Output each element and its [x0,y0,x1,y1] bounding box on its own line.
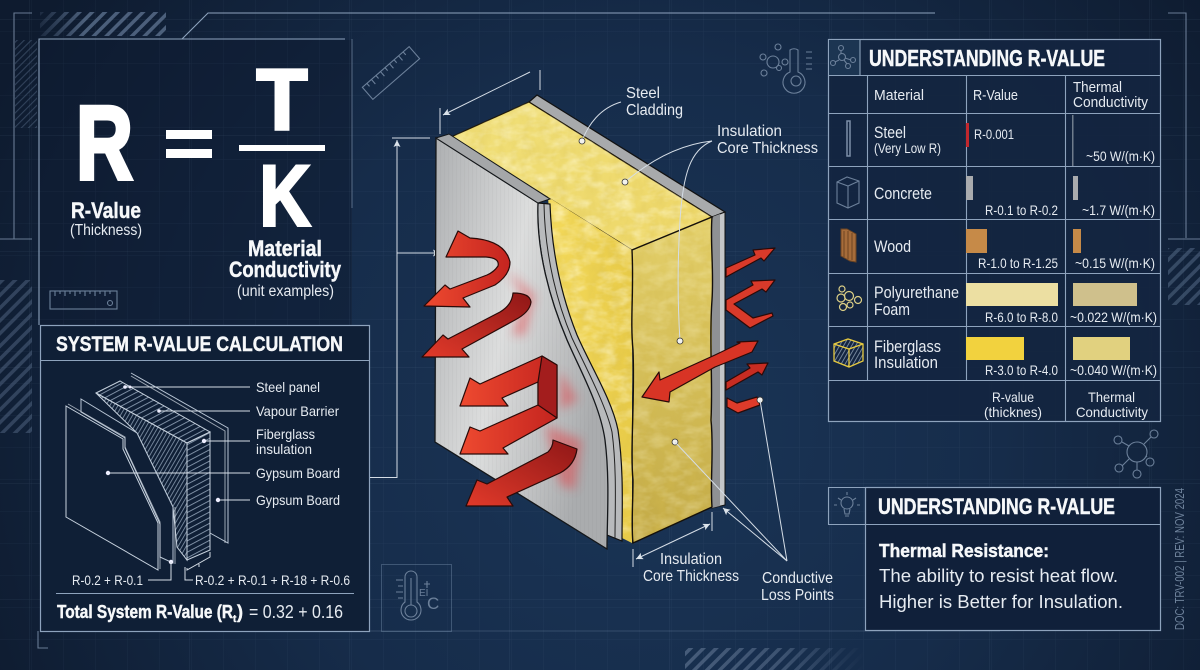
bottom insulation dimension [633,512,739,585]
material label: Material [248,236,322,261]
panel heading: SYSTEM R-VALUE CALCULATION [56,333,343,356]
row: fiberglass insulation: Insulation [874,354,938,372]
row: wood: Wood [874,238,911,256]
conductive loss points label [675,400,834,604]
panel: thermal resistance definition [828,488,1160,630]
steel cladding label: Cladding [626,102,683,119]
total system R-value: t [233,614,237,625]
row: fiberglass insulation: ~0.040 W/(m·K) [1070,362,1157,378]
diagram labels: R-0.2 + R-0.1 + R-18 + R-0.6 [195,572,350,588]
red conductive loss arrows on right [642,248,775,413]
total system R-value: Total System R-Value (R [57,602,233,622]
row: steel: R-0.001 [974,126,1014,142]
diagram labels: Gypsum Board [256,465,340,481]
steel cladding label [626,85,683,119]
icon: light bulb [834,492,860,516]
row: wood [841,229,1155,271]
icon: network hub [1114,430,1158,478]
row: fiberglass insulation [834,337,1157,378]
icon box: thermometer: EI [419,588,428,599]
column headers: R-Value [973,87,1018,104]
conductivity label: Conductivity [229,257,342,282]
insulation core thickness label: Core Thickness [717,140,818,157]
exploded wall diagram [66,373,228,570]
row: polyurethane foam: ~0.022 W/(m·K) [1070,309,1157,325]
definition heading: Thermal Resistance: [879,541,1049,561]
K letter: K [260,148,310,244]
insulation core thickness label [717,123,818,157]
row: polyurethane foam: Polyurethane [874,284,959,302]
column headers: Material [874,87,924,104]
total system R-value: ) [237,602,243,622]
table footer labels [984,389,1148,420]
column headers: Conductivity [1073,94,1148,111]
diagram labels: Fiberglass [256,426,315,442]
definition text [879,565,1123,612]
callouts on wall [579,85,834,604]
T letter: T [256,52,308,148]
row: steel: (Very Low R) [874,140,941,156]
bottom insulation dimension: Core Thickness [643,568,739,585]
row: steel: Steel [874,124,906,142]
definition text: Higher is Better for Insulation. [879,591,1123,612]
R letter: R [76,85,133,202]
diagram labels: Gypsum Board [256,492,340,508]
back steel cladding [529,95,725,508]
total system R-value: = 0.32 + 0.16 [249,602,343,622]
heat glow [507,270,582,490]
row: fiberglass insulation: R-3.0 to R-4.0 [985,362,1058,378]
insulation core [440,95,725,545]
total system R-value [57,602,343,625]
front steel panel [435,134,608,549]
document reference: DOC: TRV-002 | REV: NOV 2024 [1173,488,1187,630]
row: concrete: ~1.7 W/(m·K) [1082,202,1155,218]
row: concrete: R-0.1 to R-0.2 [985,202,1058,218]
definition text: The ability to resist heat flow. [879,565,1118,586]
table footer labels: (thicknes) [984,404,1042,420]
row: fiberglass insulation: Fiberglass [874,338,941,356]
bottom insulation dimension: Insulation [660,551,722,568]
equals sign [166,130,212,158]
row: polyurethane foam: R-6.0 to R-8.0 [985,309,1058,325]
row: polyurethane foam: Foam [874,301,910,319]
conductive loss points label: Conductive [762,570,833,587]
diagram labels [72,379,350,588]
column headers: Thermal [1073,79,1122,96]
table footer labels: Conductivity [1076,404,1148,420]
panel: system R-value calculation [40,326,370,632]
column headers [874,79,1148,111]
icon box: thermometer [382,564,452,632]
table footer labels: Thermal [1088,389,1135,405]
inner curved cladding [538,203,622,541]
conductive loss points label: Loss Points [761,587,834,604]
table footer labels: R-value [992,389,1034,405]
icon: molecule and thermometer [760,44,812,93]
formula: R equals T over K [70,52,342,300]
fraction bar [239,145,325,151]
icon box: thermometer: C [427,594,439,613]
thickness label: (Thickness) [70,222,142,239]
diagram labels: Steel panel [256,379,320,395]
row: concrete [837,176,1155,218]
red heat flow arrows on steel face [422,231,577,506]
row: steel: ~50 W/(m·K) [1086,148,1155,164]
unit examples label: (unit examples) [237,283,334,300]
row: wood: R-1.0 to R-1.25 [978,255,1058,271]
panel heading: UNDERSTANDING R-VALUE [878,494,1115,519]
dimension line: height [370,138,440,478]
row: steel [847,115,1155,166]
row: concrete: Concrete [874,185,932,203]
steel cladding label: Steel [626,85,660,102]
table heading: UNDERSTANDING R-VALUE [869,45,1105,71]
icon: small ruler [50,291,117,309]
wall cross-section illustration [422,95,775,549]
diagram labels: insulation [256,441,312,457]
insulation core thickness label: Insulation [717,123,782,140]
icon: network [830,46,856,68]
row: polyurethane foam [837,283,1157,325]
leader lines [106,385,250,580]
R-Value label: R-Value [71,198,141,223]
diagram labels: R-0.2 + R-0.1 [72,572,143,588]
row: wood: ~0.15 W/(m·K) [1075,255,1155,271]
panel: understanding R-value table [828,39,1160,422]
dimension line: width [440,70,540,134]
diagram labels: Vapour Barrier [256,403,339,419]
icon: diagonal ruler [362,47,420,99]
